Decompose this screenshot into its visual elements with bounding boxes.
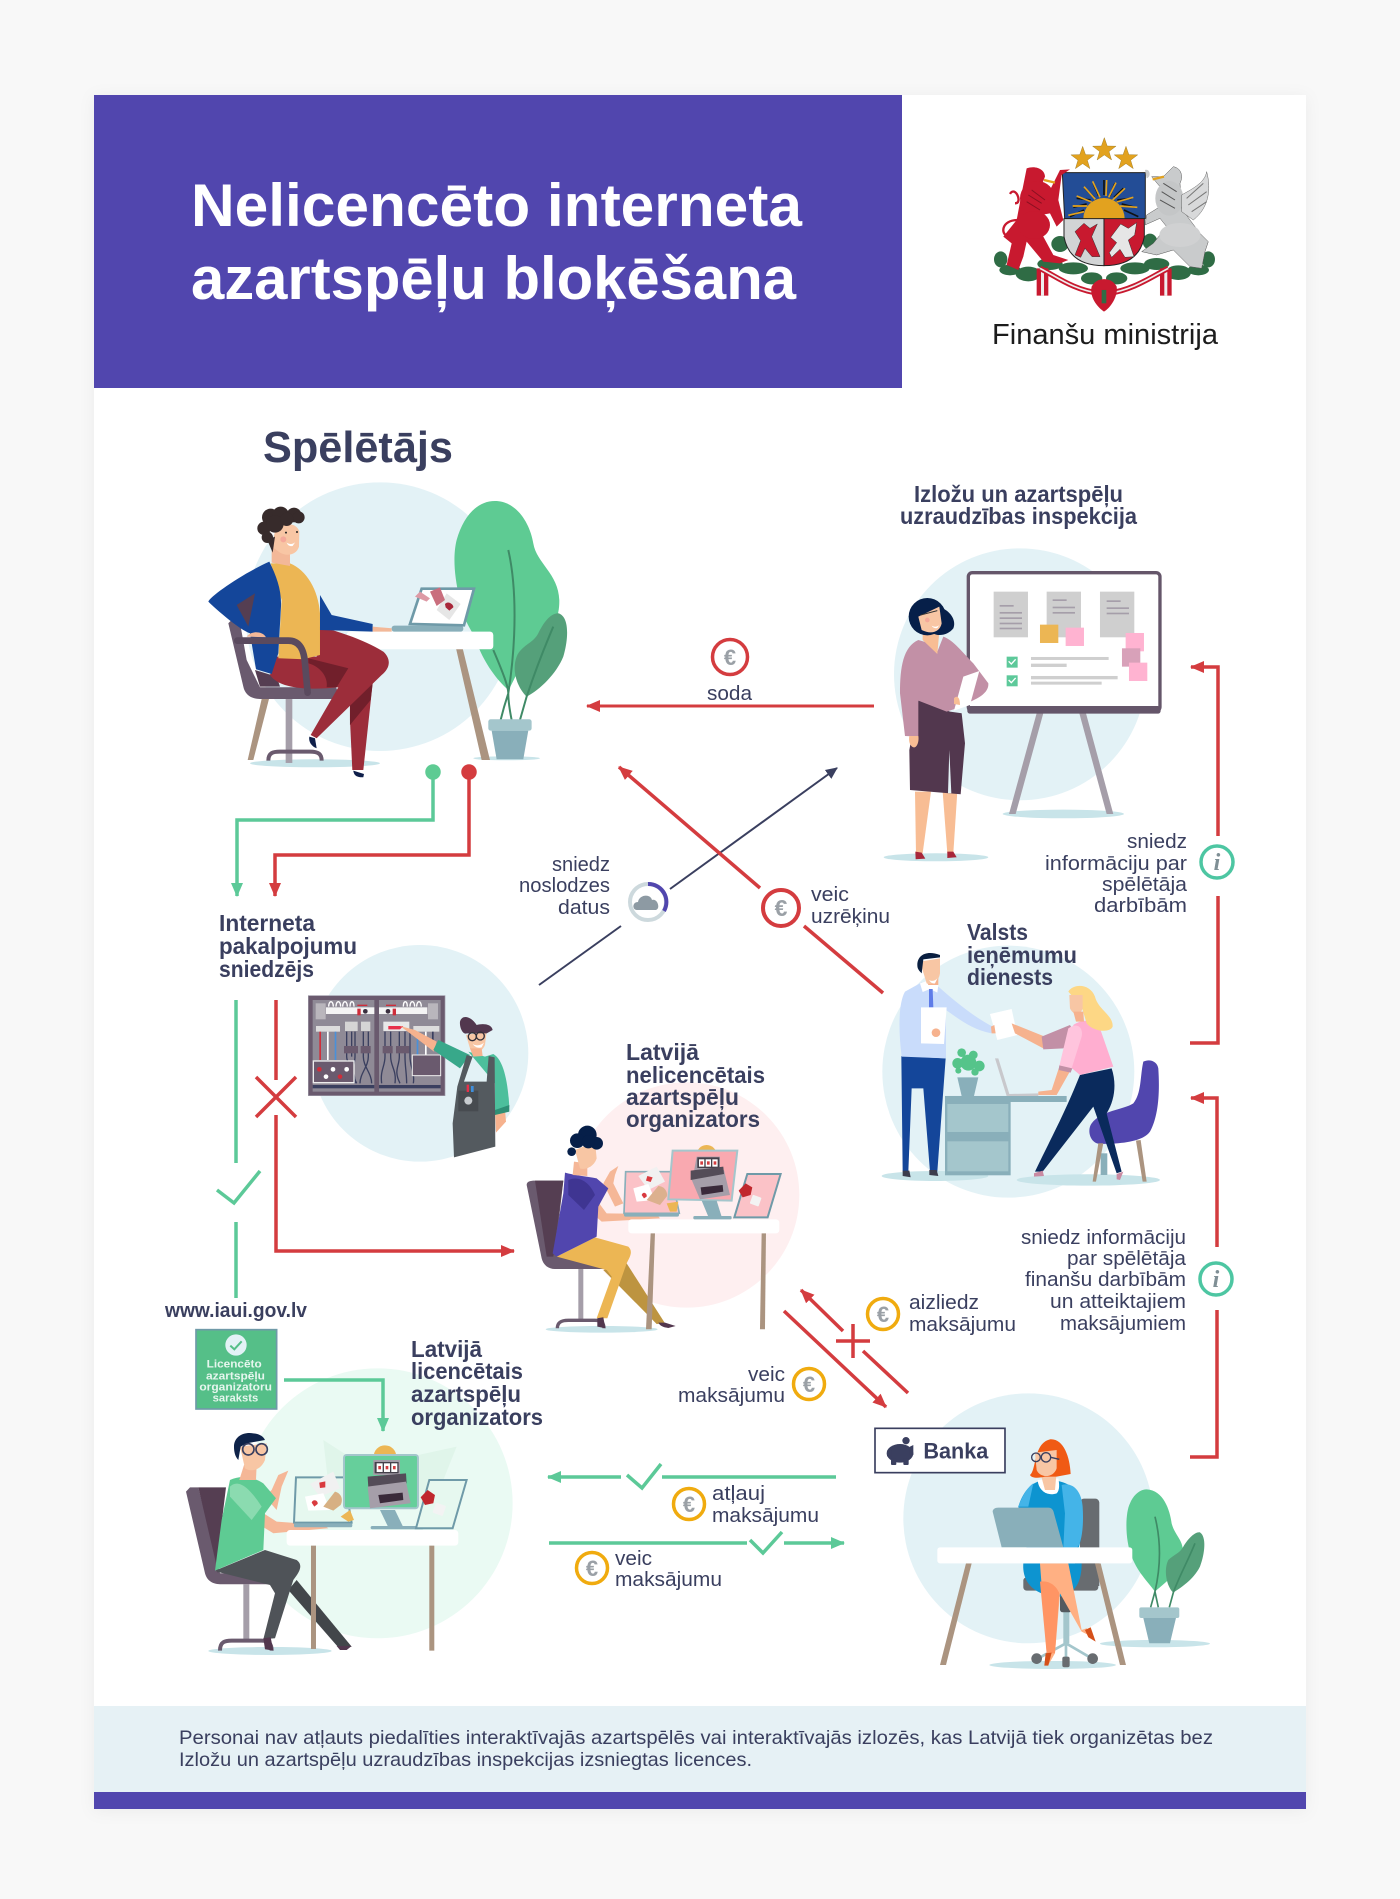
label: makes payment: maksājumu (678, 1385, 785, 1407)
title banner (94, 95, 902, 388)
heading: unlicensed organizer: organizators (626, 1106, 760, 1132)
poster card (94, 95, 1306, 1809)
label: bank (875, 1428, 1005, 1473)
icon: euro yellow (576, 1552, 608, 1584)
heading: provider (219, 910, 357, 982)
icon: check (750, 1532, 782, 1553)
heading: unlicensed organizer (626, 1039, 765, 1132)
icon: piggy bank (887, 1437, 913, 1465)
badge: licensed organizer list: saraksts (213, 1392, 258, 1404)
label: invoice with euro icon: veic (811, 884, 849, 906)
heading: revenue service: Valsts (967, 919, 1028, 945)
illustration: player at laptop (208, 482, 567, 777)
label: load data: datus (558, 897, 610, 919)
icon: euro red: € (775, 895, 788, 921)
heading: provider: sniedzējs (219, 956, 314, 982)
label: refuses payment: maksājumu (909, 1314, 1016, 1336)
heading: licensed organizer (411, 1336, 543, 1430)
heading: inspection (900, 481, 1137, 529)
panel: bank (875, 1393, 1210, 1669)
label: makes payment (678, 1364, 824, 1407)
heading: revenue service: ieņēmumu (967, 942, 1077, 968)
panel: licensed organizer (164, 1300, 543, 1655)
connector: player to service provider (237, 766, 475, 896)
title (191, 172, 803, 312)
label: allows payment (674, 1483, 819, 1527)
label: makes payment: veic (615, 1548, 652, 1570)
logo: coat of arms and ministry name (992, 138, 1219, 351)
label: info on financial activities: sniedz informāciju (1021, 1227, 1186, 1249)
heading: provider: pakalpojumu (219, 933, 357, 959)
footer note (94, 1706, 1306, 1792)
connector: bank and revenue service (1190, 1098, 1217, 1457)
label: website: www.iaui.gov.lv (164, 1300, 308, 1322)
label: invoice with euro icon: uzrēķinu (811, 906, 890, 928)
label: refuses payment: aizliedz (909, 1292, 979, 1314)
arrow: invoice (619, 767, 883, 993)
label: info on player activities (1045, 831, 1188, 917)
connector: provider allowed route with check (217, 1000, 260, 1298)
label: makes payment (576, 1548, 722, 1591)
illustration: technician at server cabinet (308, 945, 528, 1162)
icon: euro red (712, 640, 748, 674)
badge: licensed organizer list: azartspēļu (206, 1370, 265, 1382)
icon: euro yellow: € (803, 1372, 815, 1397)
icon: cloud gauge (630, 884, 666, 920)
icon: cross (836, 1324, 870, 1358)
label: makes payment: maksājumu (615, 1569, 722, 1591)
heading: revenue service (967, 919, 1077, 990)
label: soda: soda (707, 683, 753, 705)
icon: check (627, 1464, 661, 1488)
heading: inspection: uzraudzības inspekcija (900, 503, 1137, 529)
panel: state revenue service (882, 919, 1160, 1198)
label: bank: Banka (923, 1438, 989, 1463)
icon: info (1200, 1263, 1232, 1295)
illustration: bank clerk at desk (875, 1393, 1210, 1669)
icon: euro yellow: € (877, 1302, 889, 1327)
icon: euro yellow (674, 1488, 704, 1520)
label: info on player activities: sniedz (1127, 831, 1187, 853)
footer bar (94, 1792, 1306, 1809)
arrow: payment to bank (549, 1532, 844, 1553)
label: info on financial activities (1021, 1227, 1187, 1335)
label: allows payment: maksājumu (712, 1505, 819, 1527)
connector: provider blocked route with cross (256, 1000, 514, 1251)
footer note: Personai nav atļauts piedalīties interaktīvajās azartspēlēs vai interaktīvajās izlozēs, kas Latvijā tiek organizētas bez (179, 1727, 1213, 1749)
label: load data: noslodzes (519, 875, 610, 897)
label: info on financial activities: maksājumiem (1060, 1313, 1186, 1335)
panel: inspection (884, 481, 1161, 861)
heading: unlicensed organizer: nelicencētais (626, 1062, 765, 1088)
arrow: bank allows payment (548, 1464, 836, 1488)
icon: cross (256, 1077, 296, 1117)
panel: unlicensed organizer (527, 1039, 799, 1333)
heading: licensed organizer: licencētais (411, 1358, 523, 1384)
panel: internet service provider (219, 910, 528, 1162)
icon: euro yellow: € (586, 1556, 598, 1581)
heading: inspection: Izložu un azartspēļu (914, 481, 1123, 507)
arrows: refused and attempted payments (784, 1290, 908, 1407)
heading: licensed organizer: organizators (411, 1404, 543, 1430)
label: allows payment: atļauj (712, 1483, 765, 1505)
label: info on financial activities: finanšu darbībām (1025, 1269, 1186, 1291)
title: azartspēļu bloķēšana (191, 245, 797, 312)
heading: licensed organizer: azartspēļu (411, 1381, 521, 1407)
label: info on player activities: informāciju par (1045, 853, 1187, 875)
illustration: unlicensed organizer at desk (527, 1082, 799, 1333)
label: info on player activities: darbībām (1094, 895, 1187, 917)
illustration: revenue service office (882, 946, 1160, 1198)
icon: euro yellow (794, 1368, 824, 1400)
ministry name: Finanšu ministrija (992, 319, 1219, 351)
label: refuses payment (868, 1292, 1016, 1336)
icon: coat of arms (994, 138, 1215, 312)
label: invoice with euro icon (763, 884, 890, 928)
arrow: list to licensed organizer (284, 1380, 383, 1431)
label: makes payment: veic (748, 1364, 785, 1386)
label: load data: sniedz (552, 854, 610, 876)
title: Nelicencēto interneta (191, 172, 803, 239)
label: info on financial activities: par spēlētāja (1067, 1248, 1187, 1270)
label: info on player activities: spēlētāja (1102, 874, 1188, 896)
icon: check (217, 1171, 260, 1203)
icon: euro yellow (868, 1298, 898, 1330)
panel: player (208, 423, 567, 777)
badge: licensed organizer list (196, 1330, 277, 1409)
label: load data (519, 854, 610, 919)
icon: info (1201, 846, 1233, 878)
griffin and lion supporters (1003, 167, 1070, 270)
heading: unlicensed organizer: Latvijā (626, 1039, 699, 1065)
heading: licensed organizer: Latvijā (411, 1336, 482, 1362)
icon: info: i (1214, 850, 1221, 876)
heading: provider: Interneta (219, 910, 315, 936)
badge: licensed organizer list: Licencēto (207, 1359, 262, 1371)
icon: euro yellow: € (683, 1492, 695, 1517)
icon: info: i (1213, 1267, 1220, 1293)
heading: unlicensed organizer: azartspēļu (626, 1084, 739, 1110)
badge: licensed organizer list: organizatoru (199, 1381, 272, 1393)
label: info on financial activities: un atteiktajiem (1050, 1291, 1186, 1313)
illustration: inspector at board (884, 548, 1161, 861)
heading: player: Spēlētājs (263, 423, 453, 472)
icon: euro red: € (724, 645, 736, 670)
connector: revenue service to inspection (1190, 667, 1218, 1043)
arrow: load data (539, 768, 837, 985)
footer note: Izložu un azartspēļu uzraudzības inspekcijas izsniegtas licences. (179, 1749, 752, 1771)
arrow: fine from inspection to player (587, 640, 874, 706)
heading: revenue service: dienests (967, 964, 1053, 990)
illustration: licensed organizer at desk (186, 1330, 513, 1655)
